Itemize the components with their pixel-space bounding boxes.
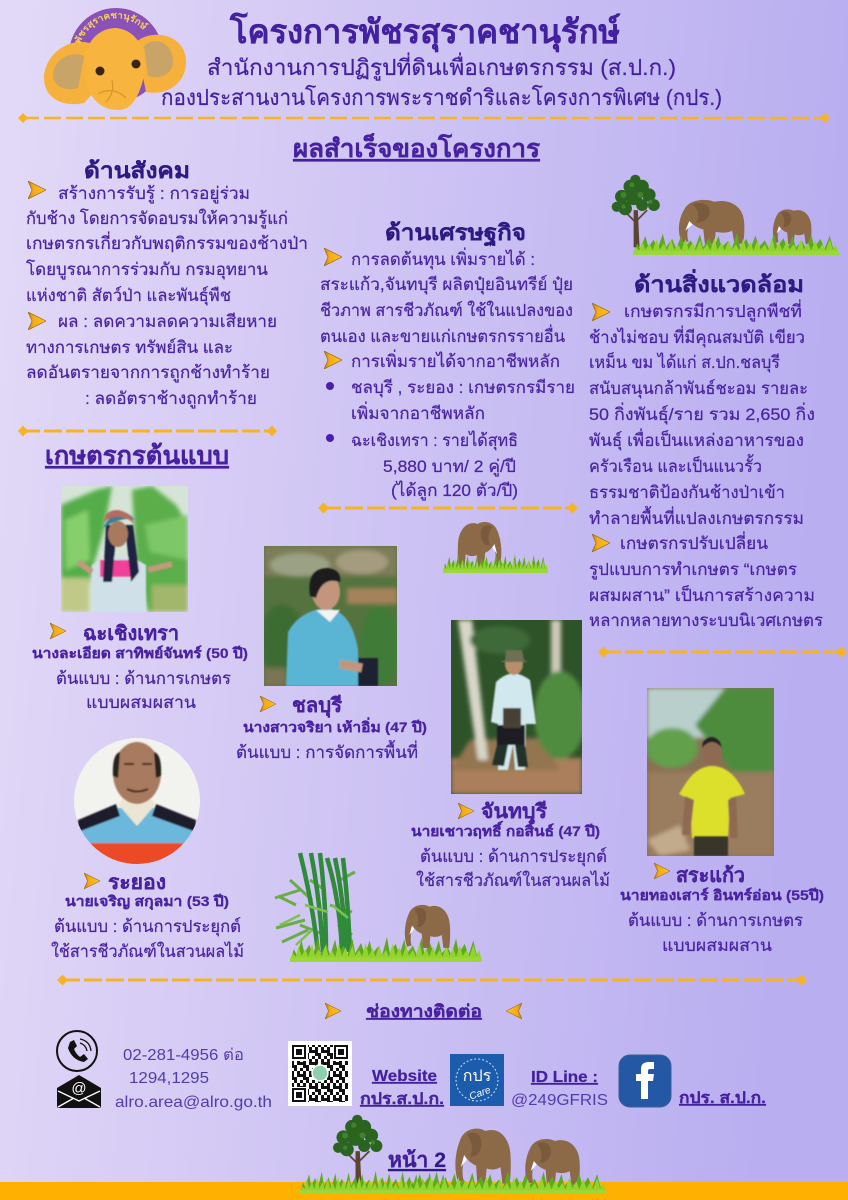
social text: แห่งชาติ สัตว์ป่า และพันธุ์พืช xyxy=(26,286,231,306)
environment text: ทำลายพื้นที่แปลงเกษตรกรรม xyxy=(589,506,804,528)
province: สระแก้ว xyxy=(676,864,745,887)
icon: facebook xyxy=(619,1055,671,1107)
panel: environment xyxy=(589,268,823,630)
contact details: 1294,1295 xyxy=(129,1070,209,1087)
logo: ORAP care xyxy=(450,1054,504,1106)
icon: arrow xyxy=(458,803,474,819)
divider: farmers xyxy=(57,974,807,986)
province: ระยอง xyxy=(108,872,166,894)
subtitle: ALRO: สำนักงานการปฏิรูปที่ดินเพื่อเกษตรกรรม (ส.ป.ก.) xyxy=(207,52,676,81)
environment text: เกษตรกรมีการปลูกพืชที่ xyxy=(624,299,802,322)
environment text: ธรรมชาติป้องกันช้างป่าเข้า xyxy=(589,483,785,502)
contact details: 02-281-4956 ต่อ xyxy=(123,1047,244,1064)
LINE ID: @249GFRIS xyxy=(511,1092,608,1109)
economy text: 5,880 บาท/ 2 คู่/ปี xyxy=(383,457,516,477)
economy text: ชีวภาพ สารชีวภัณฑ์ ใช้ในแปลงของ xyxy=(320,300,573,320)
environment text: ช้างไม่ชอบ ที่มีคุณสมบัติ เขียว xyxy=(589,325,805,348)
divider: header xyxy=(18,113,830,123)
heading: economy: ด้านเศรษฐกิจ xyxy=(385,220,526,247)
description xyxy=(628,911,803,955)
photo: Chachoengsao farmer xyxy=(61,486,188,612)
photo: Sa Kaeo farmer xyxy=(646,688,774,856)
divider: economy xyxy=(318,502,578,514)
icon: arrow xyxy=(28,181,46,199)
environment text: ครัวเรือน และเป็นแนวรั้ว xyxy=(589,454,762,476)
province: ฉะเชิงเทรา xyxy=(83,623,179,645)
illustration: elephant on grass (middle) xyxy=(443,522,548,573)
description: ต้นแบบ : ด้านการประยุกต์ xyxy=(54,917,241,937)
description: ต้นแบบ : การจัดการพื้นที่ xyxy=(236,740,418,762)
environment text xyxy=(589,299,823,630)
contact heading xyxy=(325,1002,522,1021)
description: ใช้สารชีวภัณฑ์ในสวนผลไม้ xyxy=(51,941,244,961)
social text: สร้างการรับรู้ : การอยู่ร่วม xyxy=(58,184,250,204)
LINE ID: ID Line : xyxy=(531,1069,598,1086)
icon: arrow xyxy=(654,863,670,879)
illustration: tree, elephants and grass (footer) xyxy=(300,1115,606,1194)
description: แบบผสมผสาน xyxy=(662,936,772,955)
bottom orange band xyxy=(0,1182,848,1200)
environment text: หลากหลายทางระบบนิเวศเกษตร xyxy=(589,611,823,630)
economy text: สระแก้ว,จันทบุรี ผลิตปุ๋ยอินทรีย์ ปุ๋ย xyxy=(320,275,573,295)
name: นางสาวจริยา เห้าอิ่ม (47 ปี) xyxy=(243,717,427,735)
logo: ORAP care: Care xyxy=(468,1085,493,1103)
website link: Website xyxy=(372,1068,437,1085)
farmer: Chachoengsao xyxy=(32,486,248,712)
economy text: เพิ่มจากอาชีพหลัก xyxy=(351,401,485,423)
social text: ลดอันตรายจากการถูกช้างทำร้าย xyxy=(26,363,270,383)
economy text: การเพิ่มรายได้จากอาชีพหลัก xyxy=(351,349,560,371)
description: ต้นแบบ : ด้านการเกษตร xyxy=(628,911,803,930)
heading: social: ด้านสังคม xyxy=(84,158,190,183)
name: นายเชาวฤทธิ์ กอสิ้นธ์ (47 ปี) xyxy=(411,820,600,839)
name: นายเจริญ สกุลมา (53 ปี) xyxy=(65,893,229,910)
social text: โดยบูรณาการร่วมกับ กรมอุทยาน xyxy=(26,259,268,280)
website link: กปร.ส.ป.ก. xyxy=(360,1091,444,1108)
heading: achievements: ผลสำเร็จของโครงการ xyxy=(293,133,541,163)
farmer: Chonburi xyxy=(236,546,427,762)
description: แบบผสมผสาน xyxy=(86,693,196,712)
economy text: ฉะเชิงเทรา : รายได้สุทธิ xyxy=(351,430,518,451)
description xyxy=(56,669,231,712)
contact heading: ช่องทางติดต่อ xyxy=(366,1002,482,1021)
heading: model farmers: เกษตรกรต้นแบบ xyxy=(45,442,229,470)
name: นางละเอียด สาทิพย์จันทร์ (50 ปี) xyxy=(32,645,248,661)
logo: elephant badge xyxy=(44,8,186,110)
photo: Chanthaburi farmer xyxy=(451,620,586,794)
page number: หน้า 2 xyxy=(388,1148,446,1172)
description: ใช้สารชีวภัณฑ์ในสวนผลไม้ xyxy=(416,870,610,890)
environment text: พันธุ์ เพื่อเป็นแหล่งอาหารของ xyxy=(589,428,804,451)
icon: arrow xyxy=(260,696,276,712)
social text xyxy=(26,184,308,409)
social text: ผล : ลดความลดความเสียหาย xyxy=(58,312,277,331)
photo: Chonburi farmer xyxy=(260,546,400,686)
social text: กับช้าง โดยการจัดอบรมให้ความรู้แก่ xyxy=(26,208,288,229)
province: ชลบุรี xyxy=(292,694,342,718)
website link xyxy=(360,1068,444,1108)
icon: email xyxy=(57,1075,101,1108)
photo: Rayong farmer xyxy=(74,738,200,864)
province: จันทบุรี xyxy=(481,800,547,824)
environment text: เกษตรกรปรับเปลี่ยน xyxy=(620,531,768,553)
description: ต้นแบบ : ด้านการเกษตร xyxy=(56,669,231,688)
subtitle: office: กองประสานงานโครงการพระราชดำริและโครงการพิเศษ (กปร.) xyxy=(161,85,722,110)
description: ต้นแบบ : ด้านการประยุกต์ xyxy=(420,847,607,867)
name: นายทองเสาร์ อินทร์อ่อน (55ปี) xyxy=(620,887,824,903)
economy text: ตนเอง และขายแก่เกษตรกรรายอื่น xyxy=(320,324,565,346)
social text: : ลดอัตราช้างถูกทำร้าย xyxy=(85,389,257,409)
economy text: (ได้ลูก 120 ตัว/ปี) xyxy=(391,480,518,501)
panel: social xyxy=(26,158,308,409)
environment text: เหม็น ขม ได้แก่ ส.ปก.ชลบุรี xyxy=(589,351,780,373)
economy text xyxy=(320,247,575,501)
contact details: alro.area@alro.go.th xyxy=(115,1094,272,1111)
icon: arrow xyxy=(84,873,100,889)
environment text: สนับสนุนกล้าพันธ์ชะอม รายละ xyxy=(589,379,808,399)
icon: phone xyxy=(57,1031,97,1071)
economy text: การลดต้นทุน เพิ่มรายได้ : xyxy=(351,247,535,270)
environment text: รูปแบบการทำเกษตร “เกษตร xyxy=(589,560,797,580)
icon: email: @ xyxy=(71,1080,87,1097)
logo: ORAP care: กปร xyxy=(463,1068,492,1085)
logo: elephant badge: พัชรสุราคชานุรักษ์ xyxy=(74,12,150,43)
LINE ID xyxy=(511,1069,608,1109)
icon: arrow xyxy=(50,623,66,639)
farmer: Sa Kaeo xyxy=(620,688,824,955)
facebook label: กปร. ส.ป.ก. xyxy=(679,1090,766,1107)
economy text: ชลบุรี , ระยอง : เกษตรกรมีราย xyxy=(351,378,575,398)
environment text: ผสมผสาน” เป็นการสร้างความ xyxy=(589,584,815,605)
illustration: bamboo and elephant xyxy=(275,853,482,962)
heading: environment: ด้านสิ่งแวดล้อม xyxy=(634,268,804,297)
QR code xyxy=(288,1041,352,1106)
divider: environment xyxy=(598,646,847,658)
divider: social xyxy=(18,426,277,436)
illustration: tree and elephants (top right) xyxy=(612,175,839,255)
social text: เกษตรกรเกี่ยวกับพฤติกรรมของช้างป่า xyxy=(26,231,308,253)
farmer: Chanthaburi xyxy=(411,620,610,890)
description xyxy=(416,847,610,890)
panel: economy xyxy=(320,220,575,501)
environment text: 50 กิ่งพันธุ์/ราย รวม 2,650 กิ่ง xyxy=(589,402,815,425)
farmer: Rayong xyxy=(51,735,244,961)
title: โครงการพัชรสุราคชานุรักษ์ xyxy=(229,12,621,53)
social text: ทางการเกษตร ทรัพย์สิน และ xyxy=(26,338,233,357)
description xyxy=(51,917,244,961)
contact details xyxy=(115,1047,272,1111)
